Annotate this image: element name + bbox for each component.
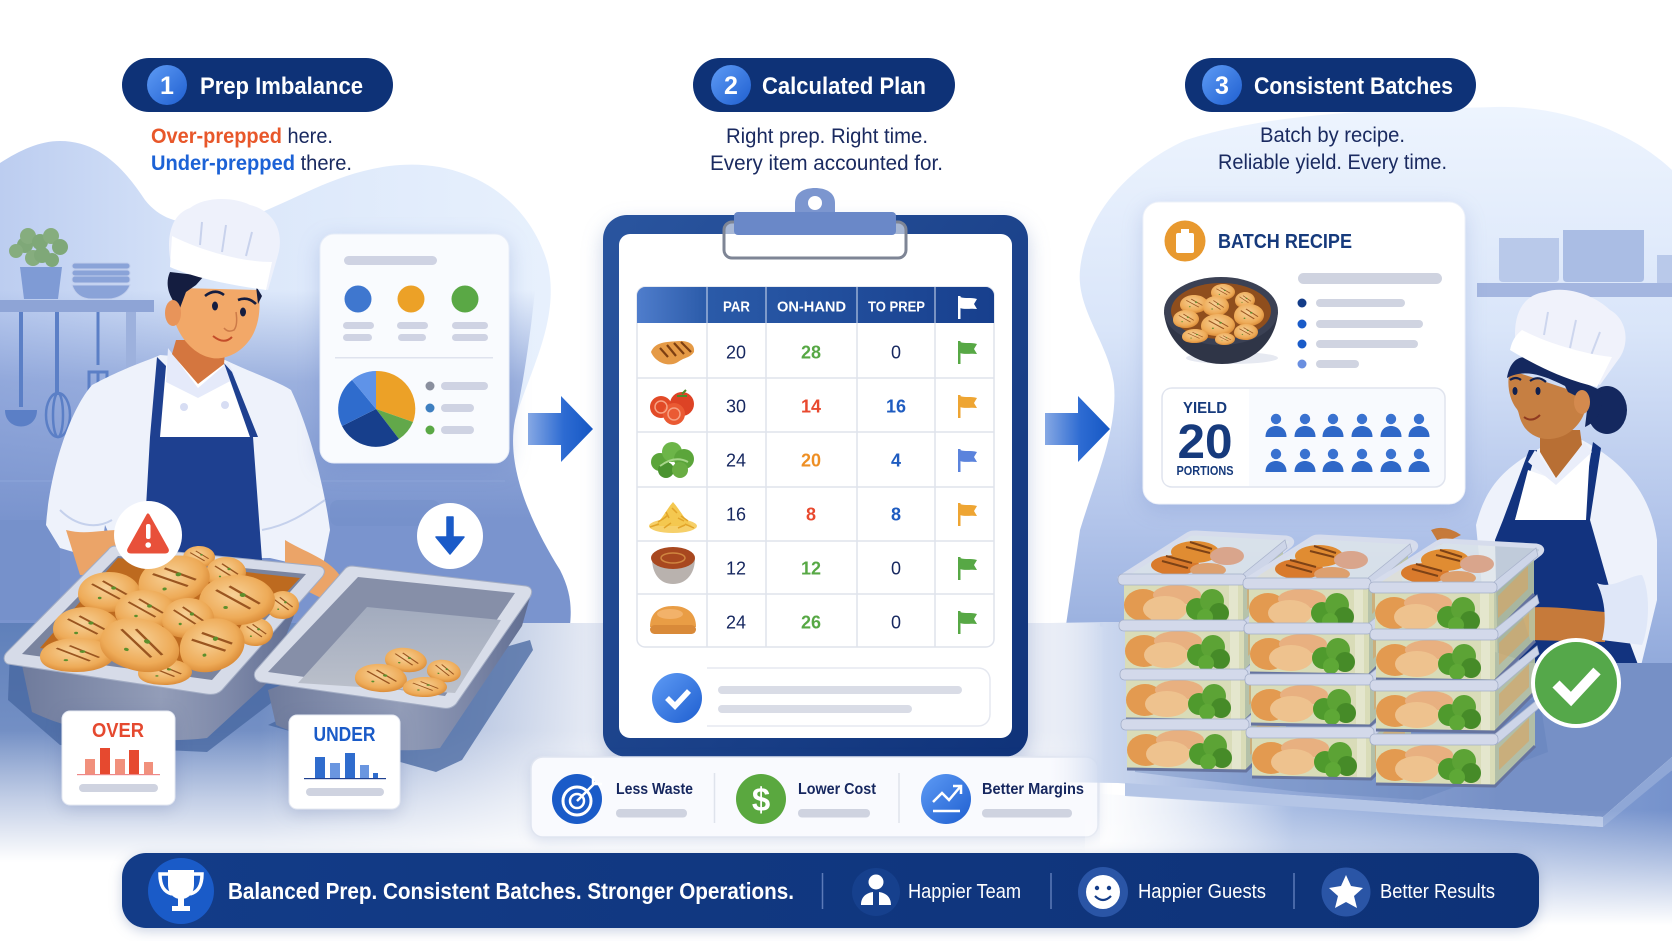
bottom banner: Balanced Prep. Consistent Batches. Stronger Operations. [228,878,794,904]
left counter fade [260,623,600,863]
left counter [0,623,600,863]
step 3 description [1218,124,1447,174]
clipboard [603,188,1028,757]
table values: 12 [726,558,746,578]
left backdrop shading [0,290,571,625]
table header: ON-HAND [777,298,846,316]
right counter [1050,622,1672,941]
down arrow badge [417,503,483,569]
pill 2 heading [693,58,955,112]
column 2 [1243,537,1416,779]
left pan: over-prepped [4,546,324,752]
pill 1 heading: 1 [160,72,174,100]
step 2 description [710,125,943,175]
bottom banner: Happier Guests [1138,881,1266,903]
note box [652,668,990,726]
lower cost text: Lower Cost [798,781,877,798]
icon: hanging ladle [5,312,37,426]
table header: TO PREP [868,298,925,316]
less waste text: Less Waste [616,781,693,798]
step 2 description: Right prep. Right time. [726,125,928,148]
bottom banner [122,853,1539,928]
pill 3 heading: Consistent Batches [1254,73,1453,100]
apron [143,357,262,560]
sleeve [1597,575,1648,645]
table header [637,287,994,323]
right pan: under-prepped [254,566,533,772]
lower cost text [798,781,877,818]
food pieces [354,645,463,697]
neck [172,340,226,384]
left backdrop blob [0,141,571,625]
table values: 0 [891,558,901,578]
column 1 [1118,533,1292,771]
recipe card: BATCH RECIPE [1218,231,1352,253]
better margins text: Better Margins [982,781,1084,798]
jacket [46,355,330,570]
bowl of food [1164,277,1278,364]
arrow 2 [1045,396,1110,462]
neck [1540,430,1582,478]
prep table [637,287,994,647]
status flags [958,341,977,634]
chef hat [1512,290,1626,385]
step 3 description: Reliable yield. Every time. [1218,151,1447,174]
portion people [1266,414,1430,472]
table values: 12 [801,558,821,578]
table values: 28 [801,342,821,362]
step 1 description: Under-prepped there. [151,152,352,175]
table values: 20 [726,342,746,362]
table values: 4 [891,450,901,470]
chef 2 [1431,290,1657,670]
food: tomatoes [650,390,694,425]
icon: better results [1322,868,1370,916]
under counter shade [1090,770,1672,925]
recipe card [1143,202,1465,504]
yield box: YIELD [1183,400,1227,417]
bottom fade [0,730,1110,865]
hair [1507,357,1602,427]
over card: OVER [92,720,145,742]
table grid [637,323,994,647]
food: lettuce [651,442,694,478]
face [1508,370,1586,439]
icon: hanging fork [89,312,107,395]
table values: 0 [891,612,901,632]
icon: target [552,774,602,824]
benefits card [531,757,1098,837]
step 1 description: Over-prepped here. [151,125,333,148]
right kitchen shelf [1477,230,1672,297]
pill 3 heading: 3 [1215,72,1229,100]
face [171,288,260,358]
food: sauce bowl [651,547,695,584]
chef 1 [46,199,345,600]
icon: growth chart [921,774,971,824]
chef hat [169,199,280,290]
table values: 0 [891,342,901,362]
jacket [1476,440,1657,670]
yield box [1162,388,1445,487]
bar chart [304,753,386,779]
table values: 24 [726,612,746,632]
eyes and smile [1510,378,1546,420]
left kitchen shelf [0,228,505,620]
column 3 [1369,541,1542,786]
middle counter [480,623,1100,863]
table values: 14 [801,396,821,416]
pie chart [338,371,415,447]
icon: happier team [852,868,900,916]
icon: trophy [148,858,214,924]
less waste text [616,781,693,818]
yield box: 20 [1178,416,1232,469]
food: grilled chicken [651,341,694,364]
icon: potted plant [9,228,68,299]
yield box: PORTIONS [1176,464,1234,478]
pie legend [426,382,488,434]
table values [726,342,906,632]
food: shredded cheese [649,502,697,533]
forearms [66,530,345,600]
icon: check [652,673,702,723]
stacked meal containers [1118,533,1542,786]
pill 2 heading: Calculated Plan [762,73,926,100]
eyes and smile [205,292,256,341]
table values: 8 [891,504,901,524]
table values: 8 [806,504,816,524]
arrow 1 [528,396,593,462]
icon: dollar: $ [752,781,770,818]
table values: 24 [726,450,746,470]
bar chart [77,748,160,775]
step 1 description [151,125,352,175]
table values: 26 [801,612,821,632]
over card [62,711,175,805]
better margins text [982,781,1084,818]
table values: 30 [726,396,746,416]
pill 2 heading: 2 [724,72,738,100]
food: bun [650,606,696,634]
clip [724,188,906,258]
bottom banner: Better Results [1380,881,1495,903]
bottom banner: Happier Team [908,881,1021,903]
table header: PAR [723,298,750,316]
green check badge [1533,640,1619,726]
icon: recipe clipboard [1164,220,1206,262]
food pieces [40,546,299,685]
recipe lines [1298,273,1442,368]
icon: stacked bowls [72,263,130,299]
dashboard card [320,234,509,463]
table values: 16 [886,396,906,416]
hair and ear [168,272,262,308]
forearm [1520,607,1605,642]
hair bun [1587,386,1627,434]
under card: UNDER [314,724,376,746]
icon: dollar [736,774,786,824]
icon: happier guests [1078,867,1128,917]
pill 1 heading: Prep Imbalance [200,73,363,100]
pill 1 heading [122,58,393,112]
status dots [344,286,478,312]
table values: 16 [726,504,746,524]
step 2 description: Every item accounted for. [710,152,943,175]
table values: 20 [801,450,821,470]
under card [289,715,400,809]
warning badge [114,501,182,569]
apron [1495,442,1640,670]
step 3 description: Batch by recipe. [1260,124,1405,147]
icon: hanging whisk [46,312,70,437]
right backdrop blob [1066,107,1672,690]
chest and collar [153,362,250,437]
pill 3 heading [1185,58,1476,112]
